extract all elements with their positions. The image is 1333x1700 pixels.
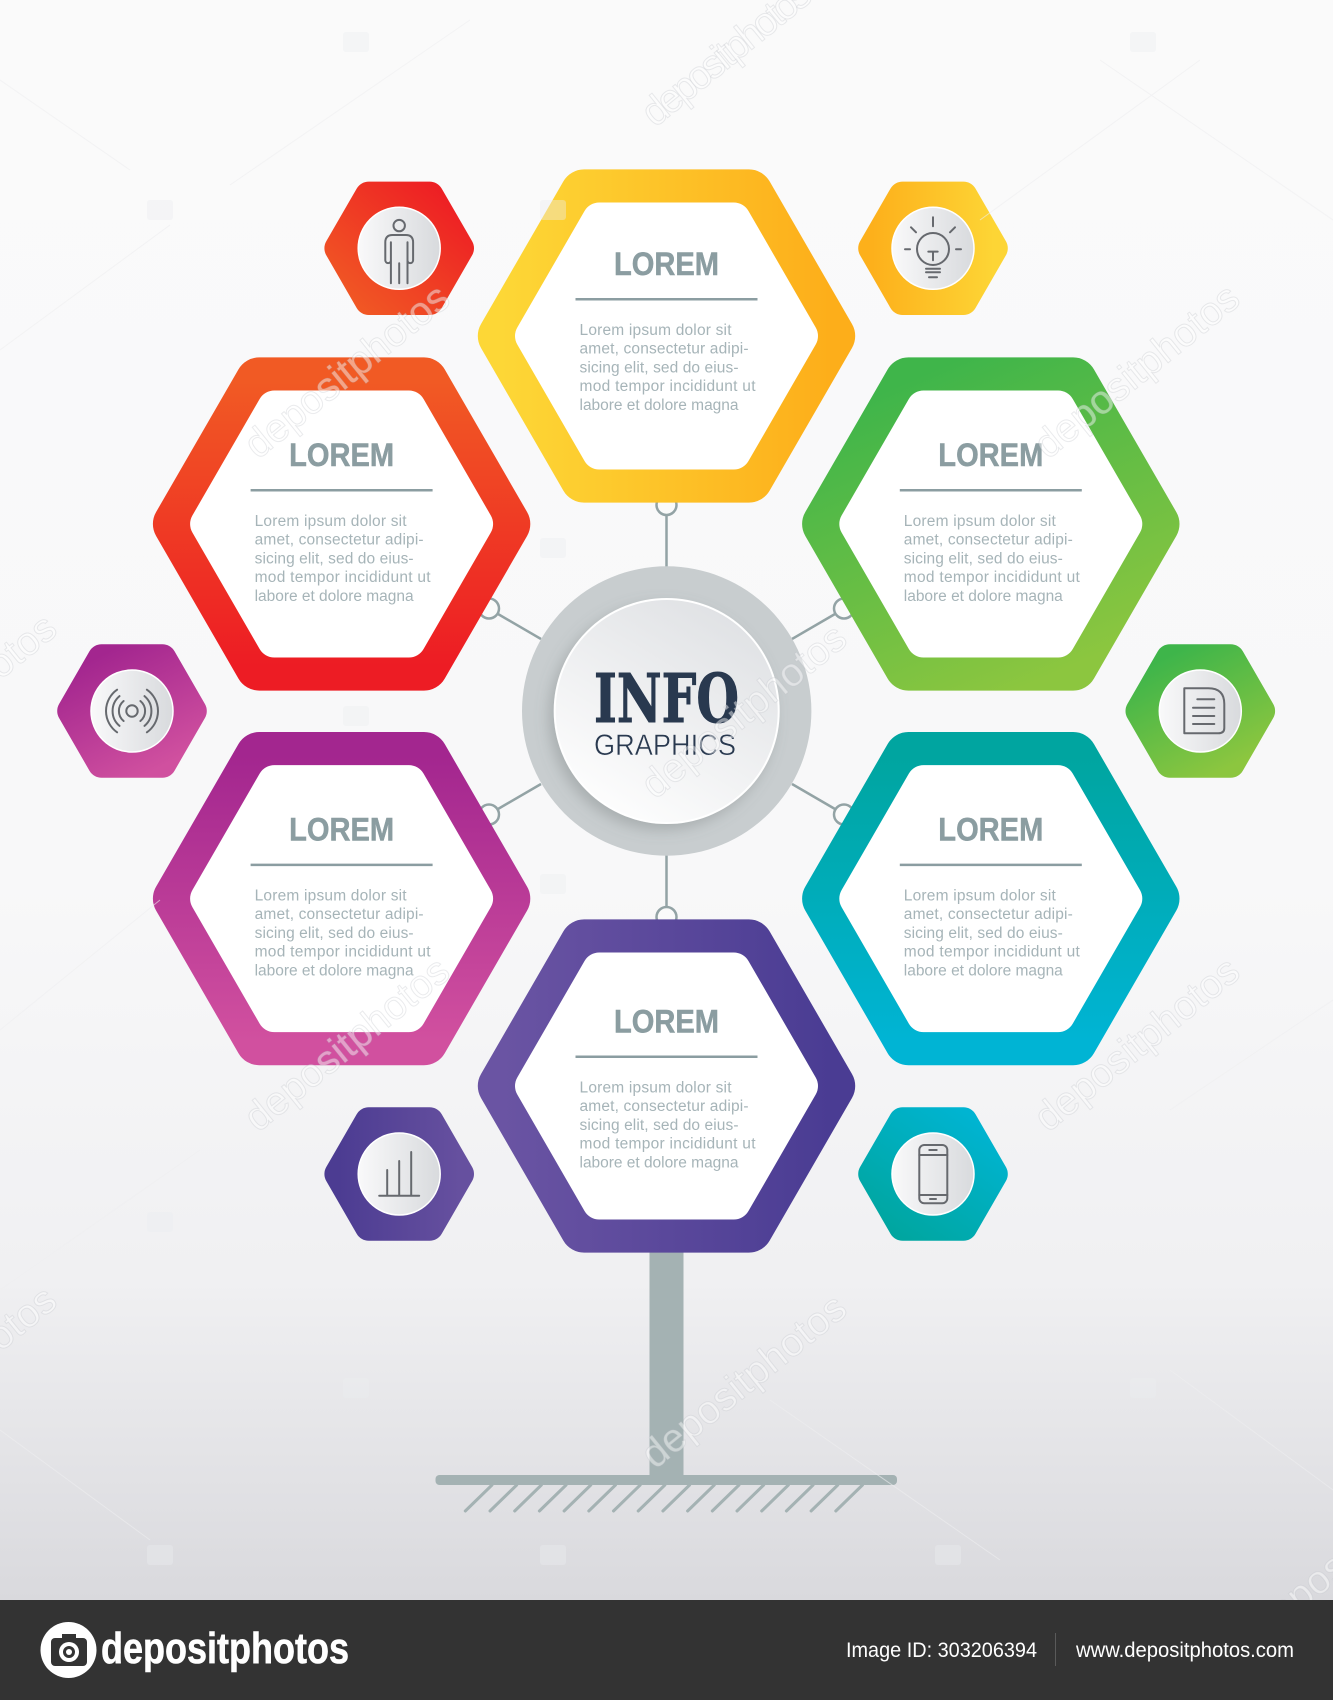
- body text: sicing elit, sed do eius-: [255, 550, 414, 568]
- icon badge: light bulb: [872, 196, 994, 301]
- footer wordmark: depositphotos: [101, 1624, 349, 1673]
- body text: [580, 322, 756, 414]
- icon: bars: [379, 1152, 419, 1196]
- body text: [255, 888, 431, 980]
- watermark overlay: depositphotos: [633, 1285, 855, 1477]
- panel: bottom violet hexagon: [502, 943, 831, 1229]
- watermark overlay: depositphotos: [1026, 948, 1248, 1140]
- panel: left magenta hexagon: [177, 756, 506, 1041]
- connectors: hub links with ring ends: [479, 495, 854, 927]
- footer bar: [0, 1600, 1333, 1700]
- body text: labore et dolore magna: [904, 963, 1063, 980]
- body text: labore et dolore magna: [255, 588, 414, 605]
- body text: [580, 1080, 756, 1172]
- body text: Lorem ipsum dolor sit: [580, 1080, 732, 1096]
- icon: signal waves: [106, 690, 158, 732]
- heading: LOREM: [938, 812, 1043, 848]
- panel: right green hexagon: [826, 381, 1156, 667]
- body text: [904, 888, 1080, 980]
- body text: mod tempor incididunt ut: [580, 378, 756, 395]
- watermark overlay: depositphotos: [1026, 275, 1248, 467]
- body text: amet, consectetur adipi-: [255, 532, 424, 548]
- body text: amet, consectetur adipi-: [580, 340, 748, 358]
- body text: labore et dolore magna: [580, 397, 739, 414]
- body text: labore et dolore magna: [580, 1154, 739, 1172]
- icon badge: person: [338, 196, 460, 301]
- body text: Lorem ipsum dolor sit: [255, 888, 407, 905]
- body text: [255, 513, 431, 605]
- icon: bulb: [905, 217, 961, 277]
- hub title: INFO: [594, 659, 739, 738]
- body text: Lorem ipsum dolor sit: [255, 513, 407, 530]
- body text: [904, 513, 1080, 605]
- body text: sicing elit, sed do eius-: [580, 1117, 738, 1134]
- body text: sicing elit, sed do eius-: [904, 550, 1063, 568]
- body text: sicing elit, sed do eius-: [904, 925, 1063, 942]
- body text: amet, consectetur adipi-: [255, 906, 424, 923]
- body text: sicing elit, sed do eius-: [580, 360, 738, 376]
- body text: sicing elit, sed do eius-: [255, 925, 414, 942]
- icon badge: phone: [872, 1121, 994, 1227]
- footer logo icon: [40, 1622, 96, 1678]
- heading: LOREM: [289, 812, 394, 848]
- body text: mod tempor incididunt ut: [255, 944, 431, 961]
- body text: amet, consectetur adipi-: [580, 1098, 748, 1115]
- image id: Image ID: 303206394: [846, 1639, 1037, 1662]
- watermark overlay: depositphotos: [236, 948, 458, 1140]
- body text: mod tempor incididunt ut: [580, 1136, 756, 1152]
- body text: mod tempor incididunt ut: [904, 944, 1080, 961]
- center hub: [522, 566, 811, 856]
- body text: amet, consectetur adipi-: [904, 532, 1073, 548]
- panel: top yellow hexagon: [502, 193, 831, 479]
- body text: amet, consectetur adipi-: [904, 906, 1073, 923]
- icon: person: [385, 220, 413, 283]
- site url: www.depositphotos.com: [1075, 1639, 1294, 1662]
- body text: mod tempor incididunt ut: [255, 569, 431, 586]
- icon badge: bar chart: [338, 1121, 460, 1227]
- heading: LOREM: [289, 437, 394, 473]
- body text: labore et dolore magna: [904, 588, 1063, 605]
- heading: LOREM: [614, 246, 719, 282]
- watermark overlay: depositphotos: [236, 275, 458, 467]
- icon badge: document: [1140, 658, 1261, 764]
- pole and ground: [436, 1250, 897, 1511]
- panel: right teal hexagon: [826, 756, 1156, 1041]
- hub subtitle: GRAPHICS: [594, 729, 736, 762]
- body text: labore et dolore magna: [255, 963, 414, 980]
- body text: Lorem ipsum dolor sit: [904, 513, 1056, 530]
- body text: mod tempor incididunt ut: [904, 569, 1080, 586]
- icon badge: signal: [71, 658, 193, 764]
- body text: Lorem ipsum dolor sit: [580, 322, 732, 339]
- panel: left red hexagon: [177, 381, 506, 667]
- icon: document: [1184, 688, 1224, 733]
- heading: LOREM: [614, 1004, 719, 1040]
- watermark overlay: depositphotos: [633, 615, 855, 807]
- icon: phone: [919, 1145, 947, 1203]
- body text: Lorem ipsum dolor sit: [904, 888, 1056, 905]
- heading: LOREM: [938, 437, 1043, 473]
